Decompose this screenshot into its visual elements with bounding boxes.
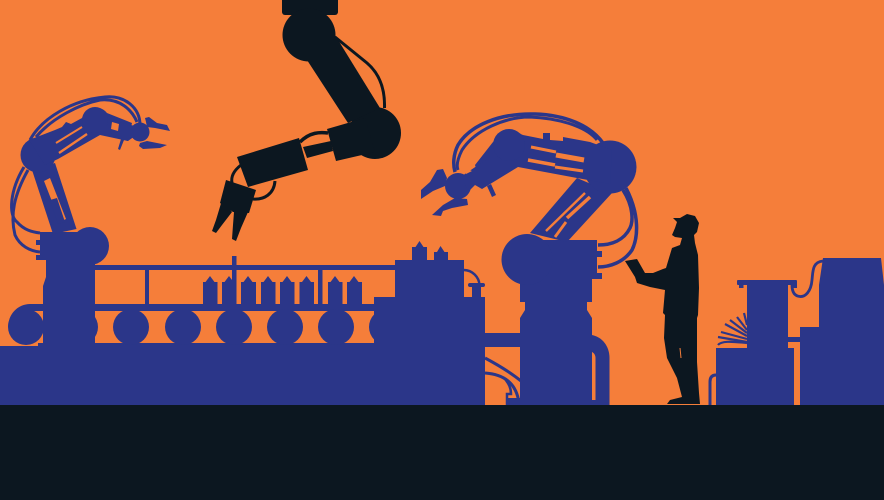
left robot arm <box>12 97 170 345</box>
hoses <box>12 97 140 252</box>
factory floor <box>0 405 884 500</box>
worker with laptop <box>625 214 700 404</box>
main arm <box>307 35 380 123</box>
base and column <box>36 227 109 345</box>
filling machine <box>374 241 485 405</box>
right tank machine <box>792 258 884 405</box>
hanging dark robot arm <box>212 0 401 241</box>
hoses <box>454 114 637 267</box>
wrist and gripper <box>110 117 170 150</box>
wrist and gripper <box>421 157 497 216</box>
spring coil <box>718 313 747 345</box>
bottles on conveyor <box>203 276 362 305</box>
base and column <box>502 234 602 405</box>
lower arm <box>530 178 612 242</box>
shoulder joint <box>584 140 636 194</box>
lower arm <box>32 163 76 234</box>
upper arm <box>29 107 132 165</box>
conveyor line <box>0 256 485 405</box>
rear pipe <box>592 335 610 405</box>
shoulder joint <box>20 138 56 172</box>
right robot arm <box>421 114 637 405</box>
pipes between machine and right robot <box>485 333 522 405</box>
upper arm <box>475 129 612 189</box>
ceiling mount <box>282 0 338 15</box>
forearm <box>327 118 375 161</box>
gripper hand <box>212 165 275 241</box>
joint circles <box>282 8 336 62</box>
left press machine <box>710 280 802 405</box>
